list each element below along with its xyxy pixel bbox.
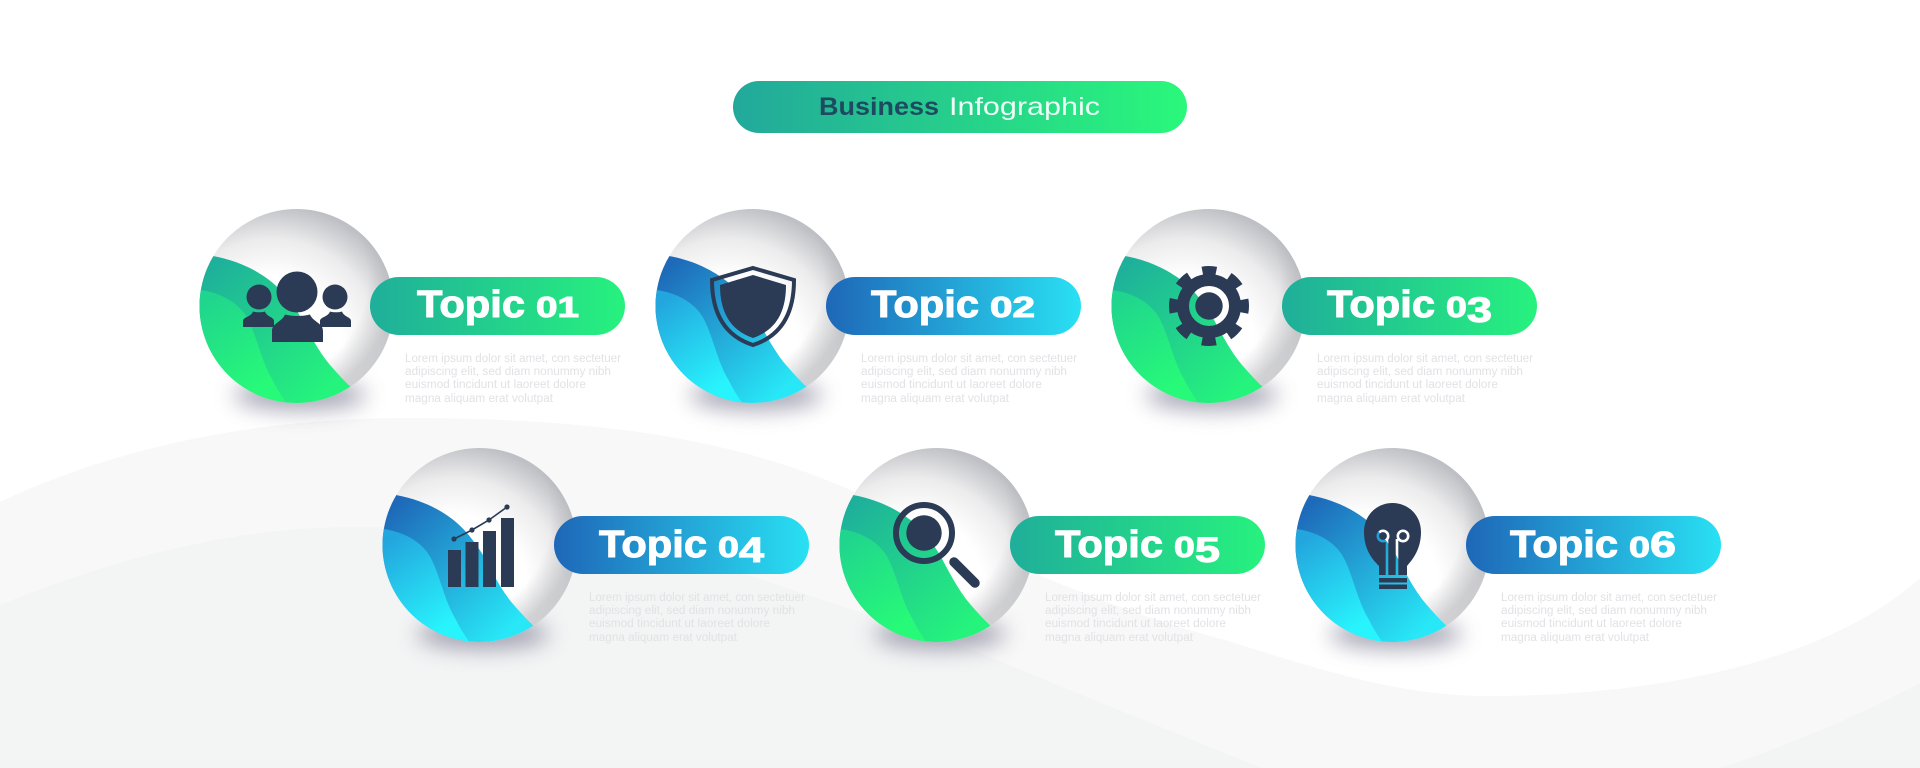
label pill <box>1282 277 1537 335</box>
description <box>1501 592 1717 644</box>
label text: Topic <box>1327 284 1435 326</box>
description: Lorem ipsum dolor sit amet, con sectetuer <box>1317 353 1533 365</box>
description <box>589 592 805 644</box>
label number: 5 <box>1195 531 1220 570</box>
description: euismod tincidunt ut laoreet dolore <box>1045 618 1226 630</box>
title <box>733 81 1187 133</box>
blue wave <box>382 495 534 642</box>
label text: Topic <box>1510 524 1618 566</box>
label number: 0 <box>1174 532 1190 564</box>
description: Lorem ipsum dolor sit amet, con sectetuer <box>1045 592 1261 604</box>
title pill <box>733 81 1187 133</box>
description: Lorem ipsum dolor sit amet, con sectetuer <box>405 353 621 365</box>
sphere shadow <box>1330 619 1462 649</box>
topic 05 <box>840 448 1265 662</box>
description: magna aliquam erat volutpat <box>1045 632 1194 644</box>
sphere shadow <box>417 619 549 649</box>
green wave <box>200 256 350 403</box>
description: adipiscing elit, sed diam nonummy nibh <box>1317 366 1523 378</box>
icon: light bulb <box>1364 503 1421 589</box>
description: euismod tincidunt ut laoreet dolore <box>861 379 1042 391</box>
sphere shadow <box>690 380 822 410</box>
icon: bar chart <box>448 504 514 587</box>
label text: Topic <box>417 284 525 326</box>
topic 04 <box>382 448 809 662</box>
title light word: Infographic <box>949 93 1100 121</box>
label pill <box>1010 516 1265 574</box>
description: adipiscing elit, sed diam nonummy nibh <box>589 605 795 617</box>
sphere <box>200 209 394 403</box>
description: adipiscing elit, sed diam nonummy nibh <box>1045 605 1251 617</box>
label number: 06 <box>1629 524 1676 565</box>
label pill <box>554 516 809 574</box>
topic 01 <box>200 209 625 424</box>
description: magna aliquam erat volutpat <box>589 632 738 644</box>
green wave <box>840 495 990 642</box>
description: magna aliquam erat volutpat <box>1501 632 1650 644</box>
label number: 02 <box>990 292 1035 324</box>
sphere <box>840 448 1034 642</box>
description: Lorem ipsum dolor sit amet, con sectetuer <box>861 353 1077 365</box>
description: adipiscing elit, sed diam nonummy nibh <box>405 366 611 378</box>
description <box>1317 353 1533 405</box>
label number: 0 <box>1446 292 1462 324</box>
sphere <box>382 448 576 642</box>
description: adipiscing elit, sed diam nonummy nibh <box>1501 605 1707 617</box>
description <box>1045 592 1261 644</box>
label text: Topic <box>1055 524 1163 566</box>
sphere <box>656 209 850 403</box>
blue wave <box>1296 495 1446 642</box>
sphere shadow <box>874 619 1006 649</box>
description: adipiscing elit, sed diam nonummy nibh <box>861 366 1067 378</box>
icon: gear <box>1174 272 1244 340</box>
label text: Topic <box>871 284 979 326</box>
description: euismod tincidunt ut laoreet dolore <box>405 379 586 391</box>
topic 02 <box>656 209 1081 424</box>
icon: magnifier <box>896 505 975 583</box>
sphere <box>1112 209 1306 403</box>
background waves <box>0 418 1920 768</box>
description: euismod tincidunt ut laoreet dolore <box>1501 618 1682 630</box>
description: magna aliquam erat volutpat <box>405 393 554 405</box>
label pill <box>1466 516 1721 574</box>
label pill <box>370 277 625 335</box>
icon: people <box>243 272 351 342</box>
description: euismod tincidunt ut laoreet dolore <box>1317 379 1498 391</box>
description: Lorem ipsum dolor sit amet, con sectetuer <box>589 592 805 604</box>
label number: 0 <box>718 532 734 564</box>
label number: 4 <box>739 531 765 570</box>
label number: 01 <box>536 292 579 324</box>
description: Lorem ipsum dolor sit amet, con sectetuer <box>1501 592 1717 604</box>
sphere shadow <box>1146 380 1278 410</box>
label number: 3 <box>1467 291 1492 330</box>
description: euismod tincidunt ut laoreet dolore <box>589 618 770 630</box>
topic 06 <box>1296 448 1721 664</box>
description: magna aliquam erat volutpat <box>861 393 1010 405</box>
sphere shadow <box>234 380 366 410</box>
blue wave <box>656 256 806 403</box>
icon: shield <box>712 268 794 345</box>
description <box>405 353 621 405</box>
green wave <box>1112 256 1262 403</box>
description <box>861 353 1077 405</box>
topic 03 <box>1112 209 1537 424</box>
description: magna aliquam erat volutpat <box>1317 393 1466 405</box>
title bold word: Business <box>819 93 939 121</box>
label pill <box>826 277 1081 335</box>
sphere <box>1296 448 1490 642</box>
label text: Topic <box>599 524 707 566</box>
